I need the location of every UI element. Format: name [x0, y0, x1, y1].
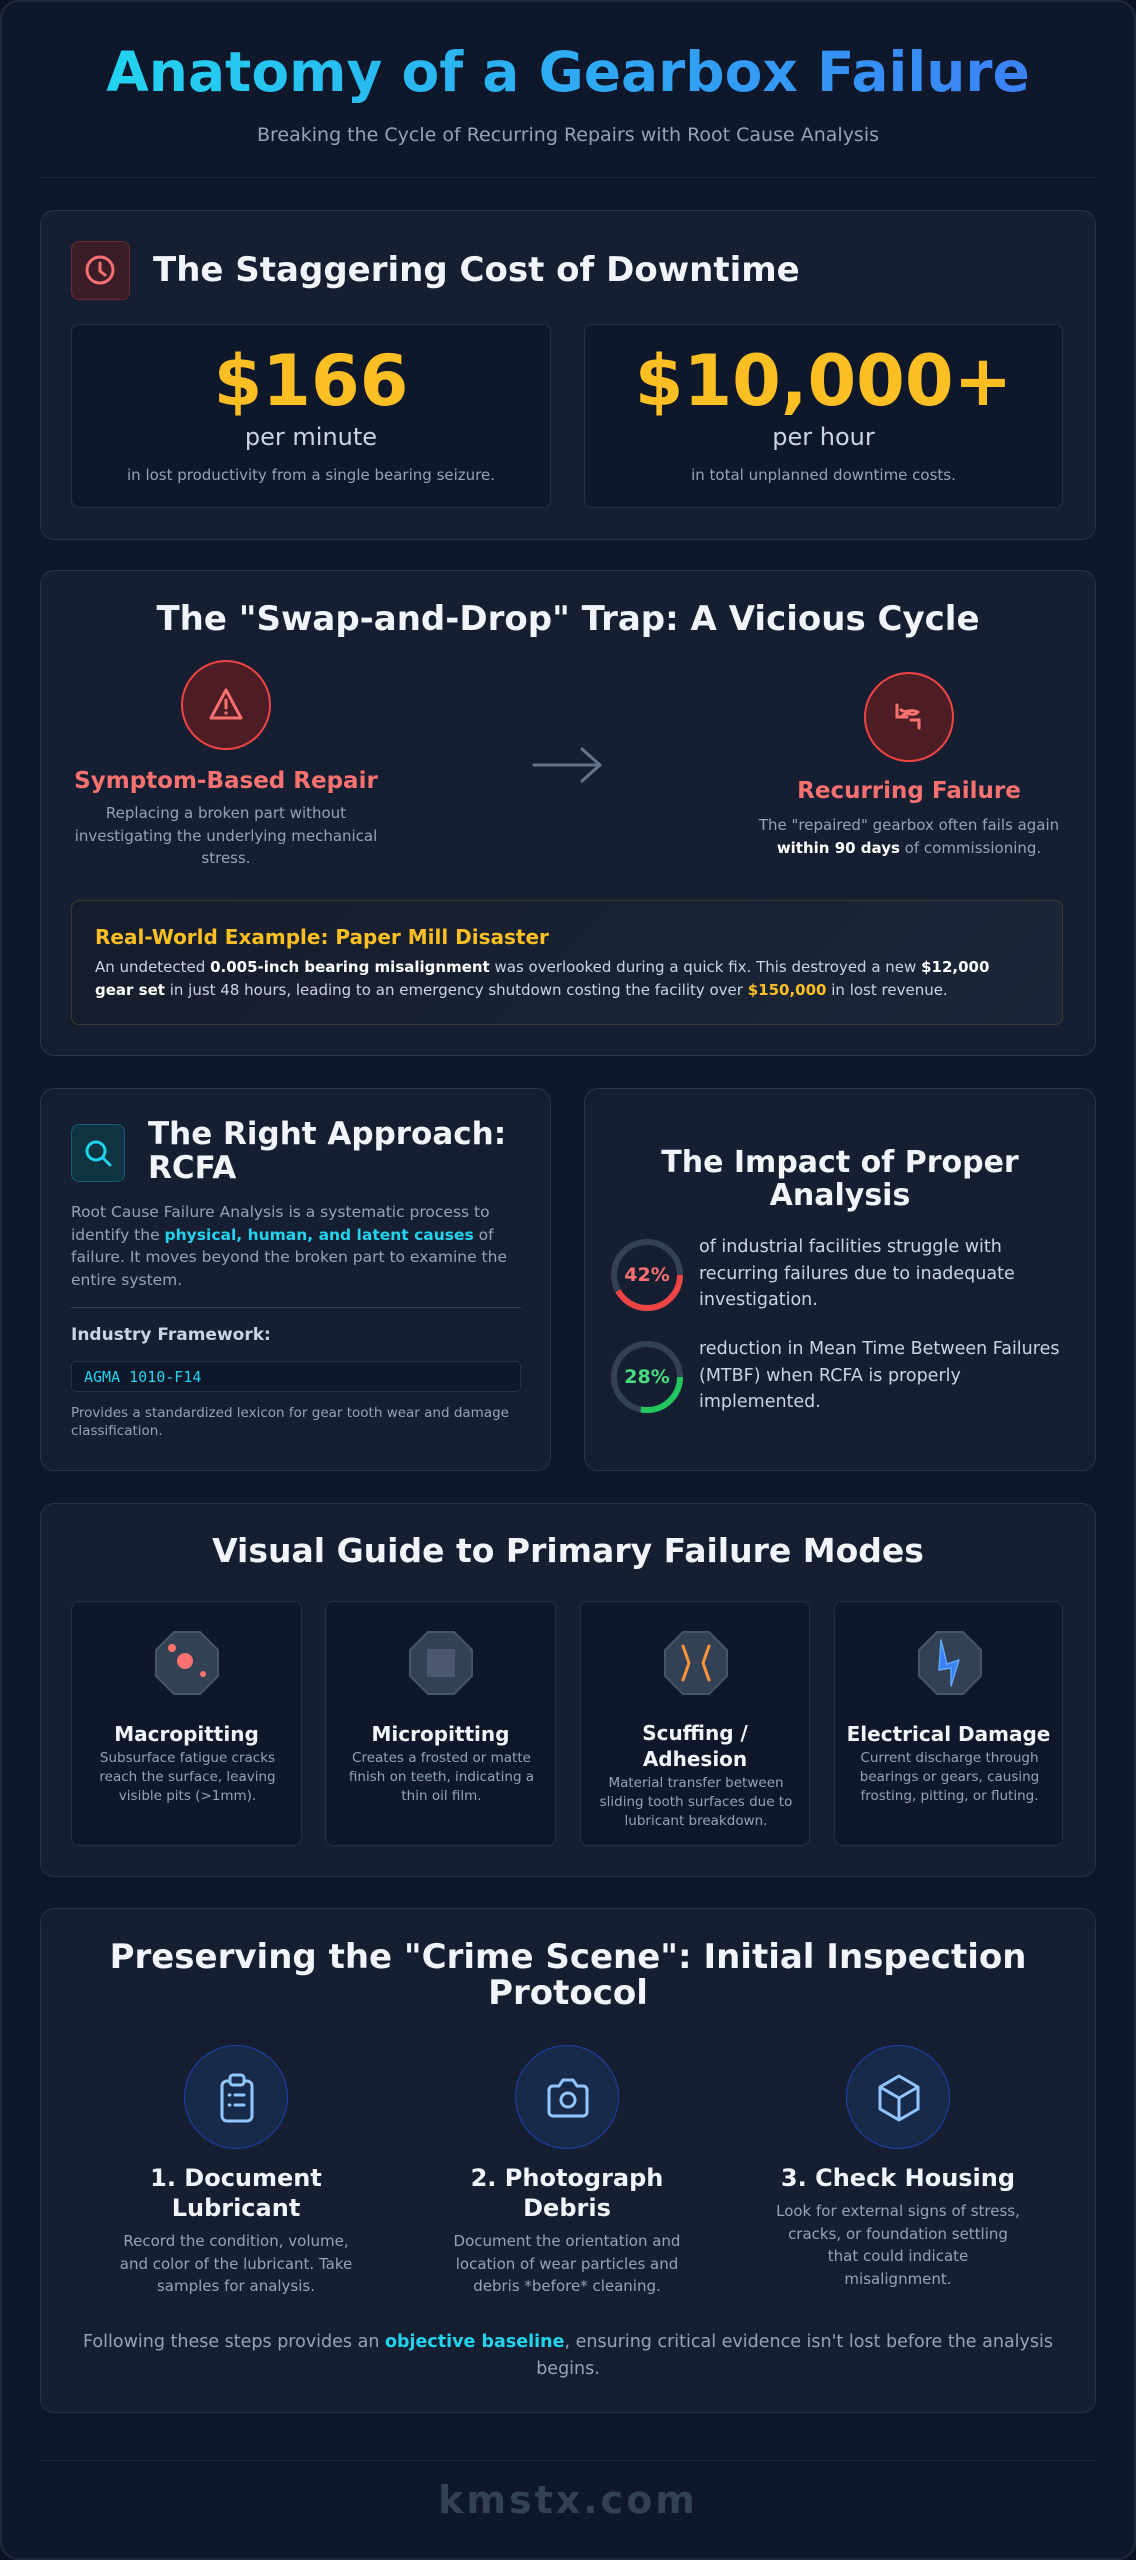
step 3: check housing: 3. Check Housing: [781, 2164, 1015, 2192]
ring: 42%: [611, 1239, 683, 1311]
recurring failure: [758, 778, 1059, 856]
panel: impact: [584, 1088, 1096, 1471]
card: electrical damage: [834, 1601, 1063, 1846]
card: macropitting: Subsurface fatigue cracks reach the surface, leaving visible pits (>1mm).: [99, 1750, 276, 1804]
icon: search: [71, 1124, 125, 1182]
card: macropitting: Macropitting: [114, 1722, 259, 1746]
industry framework: Industry Framework:: [71, 1325, 271, 1345]
recurring failure: The "repaired" gearbox often fails again within 90 days of commissioning.: [759, 816, 1059, 856]
heading: vicious cycle: The "Swap-and-Drop" Trap: A Vicious Cycle: [156, 599, 980, 639]
subtitle: Breaking the Cycle of Recurring Repairs with Root Cause Analysis: [257, 124, 879, 146]
panel: inspection protocol: [40, 1908, 1096, 2413]
text: 42%: of industrial facilities struggle with recurring failures due to inadequate investigation.: [699, 1237, 1015, 1310]
step 3: check housing: [776, 2045, 1020, 2288]
card: micropitting: Micropitting: [372, 1722, 509, 1746]
symptom-based repair: [74, 768, 378, 867]
panel: cost of downtime: [40, 210, 1096, 540]
stat: per minute: [71, 324, 551, 508]
panel: failure modes: [40, 1503, 1096, 1877]
step 1: document lubricant: Lubricant: [172, 2194, 300, 2222]
card: micropitting: Creates a frosted or matte finish on teeth, indicating a thin oil film.: [349, 1750, 534, 1804]
heading: cost of downtime: The Staggering Cost of Downtime: [153, 250, 800, 290]
ring: 42%: 42%: [624, 1264, 670, 1286]
step 2: photograph debris: Debris: [523, 2194, 611, 2222]
recurring failure: Recurring Failure: [797, 778, 1021, 804]
heading: RCFA: [148, 1116, 506, 1186]
text: RCFA description: Root Cause Failure Analysis is a systematic process to identify the physical, human, and latent causes of failure. It moves beyond the broken part to examine the entire system.: [71, 1203, 507, 1289]
step 2: photograph debris: 2. Photograph: [471, 2164, 663, 2192]
heading: RCFA: RCFA: [148, 1150, 236, 1186]
heading: RCFA: The Right Approach:: [148, 1116, 506, 1152]
step 3: check housing: Look for external signs of stress, cracks, or foundation settling that could indicate misalignment.: [776, 2202, 1020, 2288]
symptom-based repair: Symptom-Based Repair: [74, 768, 378, 794]
title: Anatomy of a Gearbox Failure: [106, 40, 1030, 104]
heading: inspection protocol: [110, 1937, 1026, 2013]
symptom-based repair: Replacing a broken part without investigating the underlying mechanical stress.: [75, 804, 377, 867]
heading: inspection protocol: Protocol: [488, 1973, 648, 2013]
heading: impact: The Impact of Proper: [661, 1145, 1019, 1180]
card: scuffing: Adhesion: [643, 1747, 747, 1771]
panel: vicious cycle: [40, 570, 1096, 1056]
heading: inspection protocol: Preserving the "Crime Scene": Initial Inspection: [110, 1937, 1026, 1977]
card: macropitting: [71, 1601, 302, 1846]
ring: 28%: [611, 1341, 683, 1413]
card: micropitting: [325, 1601, 556, 1846]
stat: per hour: $10,000+: [635, 340, 1012, 422]
text: 28%: reduction in Mean Time Between Failures (MTBF) when RCFA is properly implemented.: [699, 1339, 1059, 1412]
heading: failure modes: Visual Guide to Primary Failure Modes: [212, 1531, 924, 1570]
stat: per minute: per minute: [245, 423, 377, 451]
step 1: document lubricant: Record the condition, volume, and color of the lubricant. Take samples for analysis.: [120, 2232, 352, 2295]
icon: recurring failure: [864, 672, 954, 762]
step 1: document lubricant: [120, 2045, 352, 2295]
arrow: [532, 747, 602, 783]
callout: paper mill: An undetected 0.005-inch bearing misalignment was overlooked during a quick fix. This destroyed a new $12,000 gear set in just 48 hours, leading to an emergency shutdown costing the facility over $150,000 in lost revenue.: [95, 958, 989, 999]
stat: per hour: in total unplanned downtime costs.: [691, 466, 956, 484]
panel: RCFA: [40, 1088, 551, 1471]
text: framework note: Provides a standardized lexicon for gear tooth wear and damage classification.: [71, 1405, 509, 1439]
heading: impact: [661, 1145, 1019, 1213]
card: electrical damage: Current discharge through bearings or gears, causing frosting, pitting, or fluting.: [860, 1750, 1039, 1804]
ring: 28%: 28%: [624, 1366, 670, 1388]
step 2: photograph debris: Document the orientation and location of wear particles and debris *before* cleaning.: [454, 2232, 680, 2295]
icon: warning: [181, 660, 271, 750]
stat: per minute: $166: [214, 340, 408, 422]
code box: AGMA: [71, 1361, 521, 1392]
card: scuffing: [580, 1601, 810, 1846]
footer: brand: kmstx.com: [438, 2478, 698, 2522]
stat: per hour: per hour: [772, 423, 875, 451]
stat: per hour: [584, 324, 1063, 508]
text: protocol summary: Following these steps provides an objective baseline, ensuring critical evidence isn't lost before the analysis begins.: [83, 2332, 1053, 2378]
icon: clock: [71, 241, 130, 300]
code box: AGMA: AGMA 1010-F14: [84, 1368, 201, 1386]
step 2: photograph debris: [454, 2045, 680, 2295]
callout: paper mill: [71, 900, 1063, 1025]
card: electrical damage: Electrical Damage: [847, 1722, 1050, 1746]
callout: paper mill: Real-World Example: Paper Mill Disaster: [95, 925, 549, 949]
card: scuffing: Material transfer between sliding tooth surfaces due to lubricant breakdown.: [600, 1775, 792, 1829]
card: scuffing: Scuffing /: [642, 1721, 748, 1745]
step 1: document lubricant: 1. Document: [150, 2164, 322, 2192]
stat: per minute: in lost productivity from a single bearing seizure.: [127, 466, 495, 484]
heading: impact: Analysis: [770, 1178, 910, 1213]
